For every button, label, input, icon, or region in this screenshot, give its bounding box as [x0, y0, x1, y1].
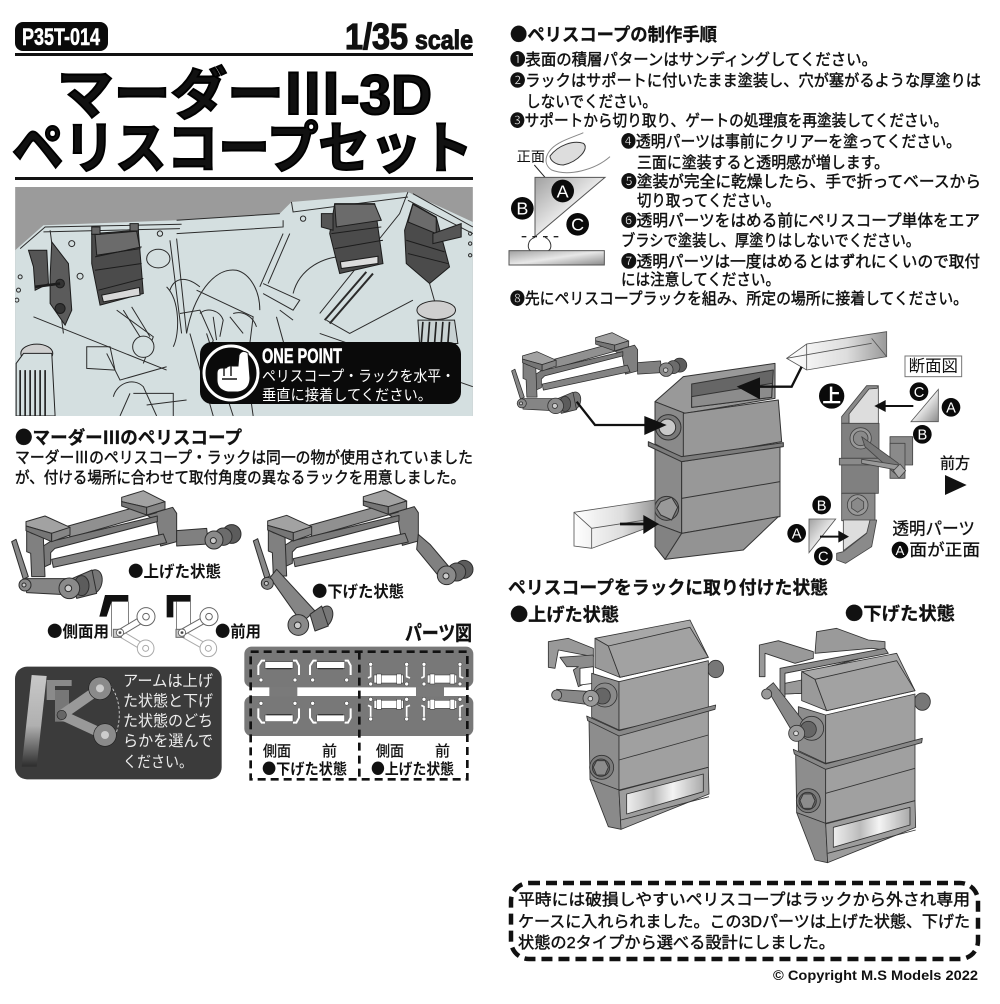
parts labels: 側面 [263, 743, 291, 760]
text block: steps: ブラシで塗装し、厚塗りはしないでください。 [621, 231, 920, 250]
periscope body [648, 363, 783, 559]
parts labels: 前 [435, 743, 450, 760]
photo panel: interior render with periscopes [15, 187, 473, 416]
label: front use: ●前用 [215, 618, 261, 642]
callout: one point [200, 342, 461, 404]
lower prism with letters: B [817, 498, 827, 514]
mounted periscope lowered [759, 628, 930, 863]
text block: rack description: マーダーⅢのペリスコープ・ラックは同一の物が使用されていました [15, 444, 473, 468]
clear parts note [892, 519, 980, 559]
text block: steps: ❼透明パーツは一度はめるとはずれにくいので取付 [621, 253, 980, 271]
text: arm note [123, 672, 213, 771]
callout: dashed note box [511, 883, 978, 959]
text block: steps: 三面に塗装すると透明感が増します。 [637, 154, 889, 172]
upper prism with letters: 上 [822, 386, 841, 407]
clear parts note: 面が正面 [909, 540, 980, 559]
text: arm note: アームは上げ [123, 672, 213, 690]
parts labels: 前 [322, 743, 337, 760]
callout: one point: ペリスコープ・ラックを水平・ [262, 368, 455, 385]
text block: rack description: が、付ける場所に合わせて取付角度の異なるラックを用意しました。 [15, 469, 465, 487]
clear parts note: 透明パーツ [892, 519, 975, 539]
text block: steps: ❶表面の積層パターンはサンディングしてください。 [510, 50, 877, 69]
dark note panel graphic [15, 667, 222, 779]
rack lowered state [253, 490, 473, 635]
label: raised state: ●上げた状態 [128, 558, 221, 582]
prism and finger diagram: A [557, 181, 569, 201]
assembly arrows [577, 367, 802, 534]
product code tag: P35T-014 [22, 24, 100, 51]
text: arm note: た状態と下げ [123, 692, 213, 710]
parts labels [262, 743, 454, 779]
text block: steps: ❷ラックはサポートに付いたまま塗装し、穴が塞がるような厚塗りは [510, 72, 981, 90]
heading: production steps: ●ペリスコープの制作手順 [510, 21, 717, 47]
text: arm note: た状態のどち [123, 712, 213, 730]
title: マーダーⅢ-3D [57, 50, 432, 131]
callout: one point: 垂直に接着してください。 [262, 387, 432, 404]
front-use arm diagram [167, 595, 218, 657]
callout: dashed note box: 状態の2タイプから選べる設計にしました。 [518, 934, 835, 952]
callout: one point: ONE POINT [262, 345, 342, 368]
text block: steps: ❹透明パーツは事前にクリアーを塗ってください。 [621, 133, 961, 151]
left column drawn in zoom coordinates [12, 490, 473, 779]
prism and finger diagram: B [516, 199, 528, 219]
heading: periscopes of Marder III: ●マーダーⅢのペリスコープ [15, 424, 242, 450]
text block: steps: には注意してください。 [621, 271, 780, 289]
upper prism with letters: C [914, 385, 925, 401]
lower prism with letters: A [792, 527, 802, 543]
label: lowered state right: ●下げた状態 [845, 600, 955, 626]
prism and finger diagram [509, 133, 610, 265]
section box: 断面図 [909, 357, 958, 376]
front direction marker [940, 456, 970, 495]
upper prism with letters [819, 382, 960, 444]
parts labels: 側面 [376, 743, 404, 760]
front direction marker: 前方 [940, 456, 970, 473]
label: lowered state: ●下げた状態 [312, 578, 404, 602]
scale label: 1/35 [345, 16, 408, 57]
parts labels: ●下げた状態 [262, 758, 347, 779]
copyright: © Copyright M.S Models 2022 [773, 967, 978, 983]
title: ペリスコープセット [12, 117, 473, 180]
icon: pointing hand [204, 346, 258, 400]
periscopes in photo [28, 204, 461, 325]
text block: steps: ❽先にペリスコープラックを組み、所定の場所に接着してください。 [510, 290, 968, 308]
text: arm note: らかを選んで [123, 732, 213, 750]
lower prism with letters [787, 496, 849, 565]
prism and finger diagram: 正面 [517, 149, 545, 165]
top prism [787, 332, 887, 370]
cross section view [837, 386, 913, 563]
heading: parts diagram: パーツ図 [405, 622, 472, 645]
label: side use: ●側面用 [47, 618, 109, 642]
callout: dashed note box: 平時には破損しやすいペリスコープはラックから外され専用 [518, 891, 970, 909]
side-use arm diagram [99, 595, 155, 657]
mounted periscope raised [548, 620, 724, 829]
clear parts note: A [896, 543, 905, 558]
callout: dashed note box: ケースに入れられました。この3Dパーツは上げた状態、下げた [518, 913, 970, 931]
text block: rack description [15, 444, 473, 487]
heading: periscope mounted on rack: ペリスコープをラックに取り付けた状態 [508, 577, 828, 598]
title [12, 50, 473, 180]
scale label [345, 16, 473, 57]
scale label: scale [415, 25, 473, 55]
bottom prism [574, 500, 655, 548]
text block: steps [510, 50, 981, 308]
text block: steps: ❻透明パーツをはめる前にペリスコープ単体をエア [621, 212, 980, 230]
prism and finger diagram: C [571, 215, 584, 235]
storage jars [16, 301, 458, 416]
text block: steps: しないでください。 [526, 93, 657, 111]
front arm lowered [762, 683, 824, 741]
rack raised state [12, 491, 241, 599]
text: arm note: ください。 [123, 753, 193, 771]
text block: steps: ❸サポートから切り取り、ゲートの処理痕を再塗装してください。 [510, 112, 948, 130]
text block: steps: ❺塗装が完全に乾燥したら、手で折ってベースから [621, 173, 981, 191]
parts diagram sprue [244, 647, 473, 779]
label: raised state right: ●上げた状態 [510, 601, 619, 627]
upper prism with letters: A [946, 401, 956, 417]
lower prism with letters: C [818, 549, 829, 565]
parts labels: ●上げた状態 [371, 758, 454, 779]
rack behind raised [548, 638, 724, 687]
exploded assembly drawing [512, 332, 980, 565]
text block: steps: 切り取ってください。 [637, 192, 780, 210]
small rack [512, 333, 687, 414]
front arm raised [552, 683, 617, 707]
rack behind lowered [759, 628, 930, 710]
upper prism with letters: B [917, 428, 927, 444]
